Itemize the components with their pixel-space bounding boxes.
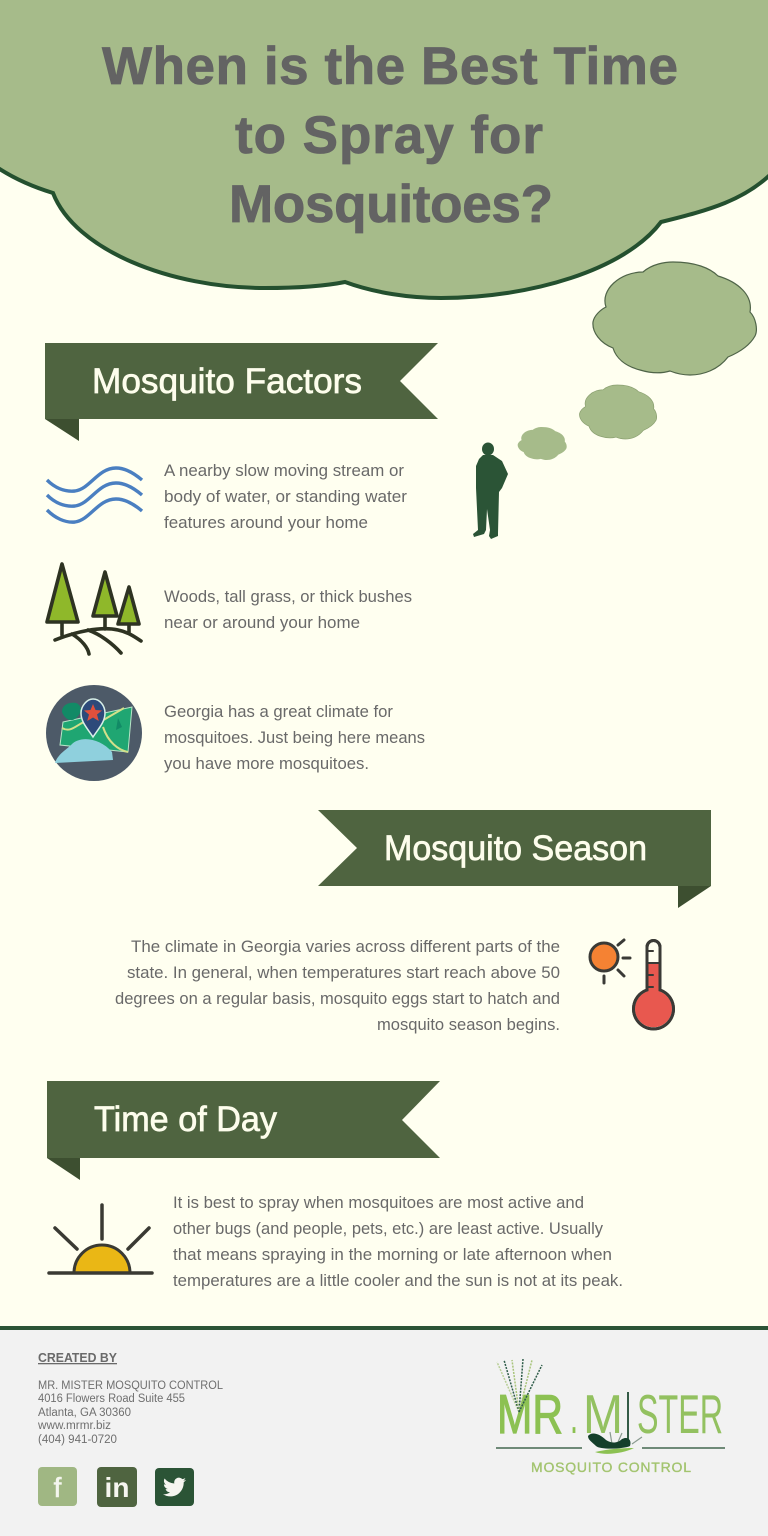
text: season description: mosquito season begins. bbox=[377, 1015, 560, 1034]
text: climate factor: mosquitoes. Just being here means bbox=[164, 728, 425, 747]
icon: map with pin bbox=[46, 685, 142, 781]
icon: sun and thermometer bbox=[590, 940, 674, 1029]
title cloud panel bbox=[0, 0, 768, 298]
panel: mosquito factors bbox=[45, 343, 438, 781]
text: climate factor: you have more mosquitoes. bbox=[164, 754, 369, 773]
logo rules bbox=[496, 1447, 725, 1449]
logo wordmark: M bbox=[583, 1383, 623, 1445]
logo mosquito bbox=[588, 1392, 642, 1454]
banner: mosquito factors: Mosquito Factors bbox=[92, 362, 362, 401]
panel: time of day bbox=[47, 1081, 623, 1290]
heading: created by: CREATED BY bbox=[38, 1350, 117, 1365]
header cloud shape bbox=[0, 0, 768, 298]
logo wordmark: . bbox=[570, 1383, 578, 1445]
small thought cloud bbox=[518, 427, 567, 460]
thought bubbles and person bbox=[473, 262, 756, 539]
banner: time of day: Time of Day bbox=[94, 1100, 277, 1139]
text: climate factor bbox=[164, 702, 425, 773]
icon: linkedin: in bbox=[105, 1472, 129, 1503]
text: time of day description: It is best to spray when mosquitoes are most active and bbox=[173, 1193, 584, 1212]
person silhouette bbox=[473, 442, 508, 539]
icon: rising sun bbox=[49, 1205, 152, 1273]
text: time of day description: other bugs (and people, pets, etc.) are least active. Usually bbox=[173, 1219, 603, 1238]
text: woods factor: Woods, tall grass, or thick bushes bbox=[164, 587, 412, 606]
text: water factor: A nearby slow moving stream or bbox=[164, 461, 404, 480]
icon: twitter bbox=[155, 1468, 194, 1506]
title bbox=[102, 37, 678, 234]
large thought cloud bbox=[593, 262, 756, 375]
medium thought cloud bbox=[579, 385, 657, 439]
panel: mosquito season bbox=[115, 810, 711, 1034]
text: contact details bbox=[37, 1380, 224, 1446]
logo tagline: MOSQUITO CONTROL bbox=[531, 1459, 691, 1475]
logo: Mr. Mister Mosquito Control bbox=[496, 1359, 725, 1475]
text: time of day description: temperatures are a little cooler and the sun is not at its peak. bbox=[173, 1271, 623, 1290]
text: contact details: Atlanta, GA 30360 bbox=[38, 1407, 131, 1419]
icon: facebook: f bbox=[54, 1472, 62, 1503]
logo wordmark bbox=[497, 1383, 723, 1445]
logo spray fan bbox=[497, 1359, 542, 1412]
text: woods factor bbox=[164, 587, 412, 632]
text: contact details: www.mrmr.biz bbox=[37, 1420, 111, 1432]
text: season description bbox=[115, 937, 560, 1034]
text: water factor: features around your home bbox=[164, 513, 368, 532]
panel: footer bbox=[0, 1326, 768, 1536]
title: Mosquitoes? bbox=[229, 175, 553, 234]
text: water factor: body of water, or standing water bbox=[164, 487, 407, 506]
text: woods factor: near or around your home bbox=[164, 613, 360, 632]
text: contact details: MR. MISTER MOSQUITO CONTROL bbox=[38, 1380, 224, 1392]
text: water factor bbox=[164, 461, 407, 532]
banner: mosquito season bbox=[318, 810, 711, 908]
text: season description: state. In general, when temperatures start reach above 50 bbox=[127, 963, 560, 982]
icon: water waves bbox=[47, 468, 142, 522]
icon: facebook bbox=[38, 1467, 77, 1506]
title: to Spray for bbox=[235, 106, 543, 165]
text: time of day description: that means spraying in the morning or late afternoon when bbox=[173, 1245, 612, 1264]
logo wordmark: MR bbox=[497, 1383, 563, 1445]
text: contact details: (404) 941-0720 bbox=[38, 1434, 117, 1446]
text: contact details: 4016 Flowers Road Suite 455 bbox=[38, 1393, 185, 1405]
banner: time of day bbox=[47, 1081, 440, 1180]
icon: trees bbox=[47, 564, 141, 654]
title: When is the Best Time bbox=[102, 37, 678, 96]
text: time of day description bbox=[173, 1193, 623, 1290]
text: climate factor: Georgia has a great climate for bbox=[164, 702, 393, 721]
banner: mosquito season: Mosquito Season bbox=[384, 829, 647, 868]
banner: mosquito factors bbox=[45, 343, 438, 441]
text: season description: The climate in Georgia varies across different parts of the bbox=[131, 937, 560, 956]
icon: linkedin bbox=[97, 1467, 137, 1507]
text: season description: degrees on a regular basis, mosquito eggs start to hatch and bbox=[115, 989, 560, 1008]
